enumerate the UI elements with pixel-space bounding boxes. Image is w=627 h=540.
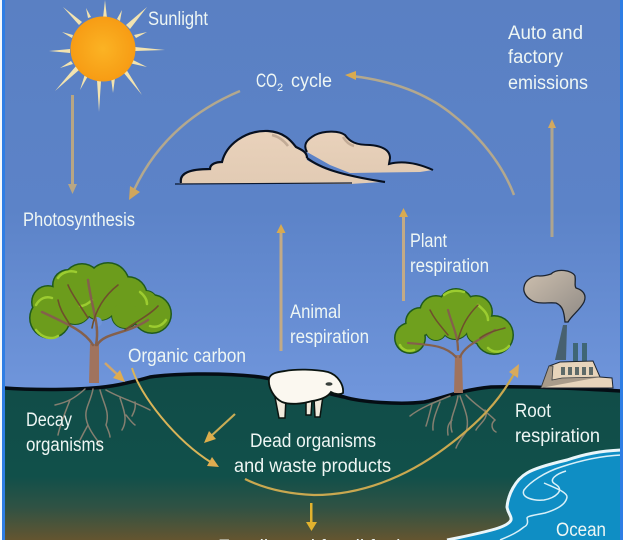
- icon: factory: [524, 270, 613, 388]
- icon: clouds: [175, 131, 433, 184]
- arrow: root respiration curve: [245, 364, 519, 495]
- ground: [3, 374, 621, 540]
- label: Root respiration: respiration: [515, 426, 600, 447]
- label: Plant respiration: [410, 231, 489, 277]
- arrow: factory to emissions: [548, 119, 556, 237]
- label: CO2 cycle: CO: [256, 71, 277, 92]
- arrow: sheep to dead organisms: [204, 414, 235, 443]
- label: Decay organisms: organisms: [26, 435, 104, 456]
- arrow: CO2 cycle to photosynthesis: [129, 91, 240, 200]
- icon: sheep: [269, 370, 343, 418]
- label: Root respiration: [515, 401, 600, 447]
- label: Photosynthesis: Photosynthesis: [23, 210, 135, 231]
- arrow: animal respiration: [276, 224, 286, 351]
- ocean: [447, 450, 621, 540]
- roots: left tree: [55, 389, 150, 445]
- label: CO2 cycle: 2: [277, 82, 283, 94]
- label: Dead organisms and waste products: [234, 431, 391, 477]
- icon: sun: [49, 0, 165, 112]
- arrow: plant respiration: [399, 208, 408, 301]
- icon: left tree: [29, 262, 172, 383]
- label: Animal respiration: respiration: [290, 327, 369, 348]
- label: Decay organisms: [26, 410, 104, 456]
- horizon line: [4, 374, 621, 403]
- icon: right tree: [394, 288, 514, 393]
- roots: right tree: [410, 395, 496, 448]
- label: Auto and factory emissions: emissions: [508, 73, 588, 94]
- arrow: organic carbon to dead organisms: [132, 368, 219, 467]
- label: Plant respiration: respiration: [410, 256, 489, 277]
- label: Animal respiration: [290, 302, 369, 348]
- arrow: dead organisms to fossil fuels: [306, 503, 317, 531]
- label: CO2 cycle: cycle: [291, 71, 332, 92]
- sky background: [0, 0, 627, 420]
- arrow: sunlight to photosynthesis: [68, 95, 77, 194]
- label: Root respiration: Root: [515, 401, 552, 422]
- label: Decay organisms: Decay: [26, 410, 72, 431]
- label: Dead organisms and waste products: and waste products: [234, 456, 391, 477]
- label: Dead organisms and waste products: Dead organisms: [250, 431, 376, 452]
- arrow: tree to soil: [105, 363, 125, 382]
- label: Organic carbon: Organic carbon: [128, 346, 246, 367]
- label: Plant respiration: Plant: [410, 231, 448, 252]
- label: Auto and factory emissions: factory: [508, 47, 563, 68]
- label: Auto and factory emissions: Auto and: [508, 23, 583, 44]
- arrow: emissions arc to CO2 cycle: [345, 71, 514, 195]
- label: Auto and factory emissions: [508, 23, 588, 94]
- label: Animal respiration: Animal: [290, 302, 341, 323]
- label: Sunlight: Sunlight: [148, 9, 209, 30]
